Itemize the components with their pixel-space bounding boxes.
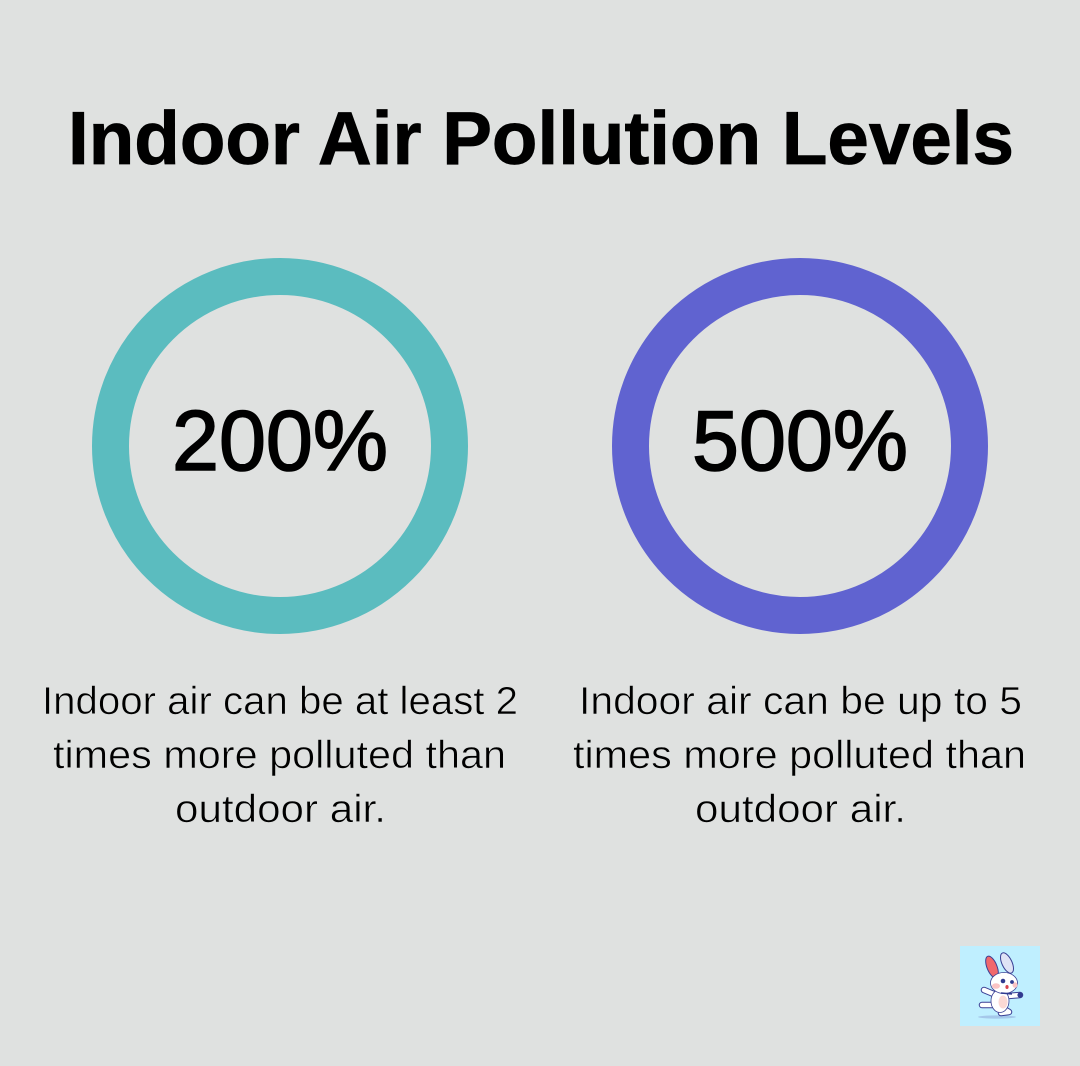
value: 500%: 500% [692, 394, 908, 489]
ring: teal [110, 276, 450, 616]
description: 2 times [42, 680, 518, 831]
description: 2 times: outdoor air. [175, 788, 386, 831]
stat panel: 200% [42, 276, 518, 831]
title: Indoor Air Pollution Levels [68, 96, 1014, 180]
ring: purple [630, 276, 970, 616]
description: 5 times: times more polluted than [573, 734, 1026, 777]
description: 2 times: times more polluted than [53, 734, 506, 777]
stat panel: 500% [573, 276, 1026, 831]
value: 200%: 200% [172, 394, 388, 489]
description: 5 times [573, 680, 1026, 831]
icon: rabbit logo [960, 946, 1040, 1026]
description: 5 times: outdoor air. [695, 788, 906, 831]
description: 2 times: Indoor air can be at least 2 [42, 680, 518, 723]
description: 5 times: Indoor air can be up to 5 [579, 680, 1022, 723]
